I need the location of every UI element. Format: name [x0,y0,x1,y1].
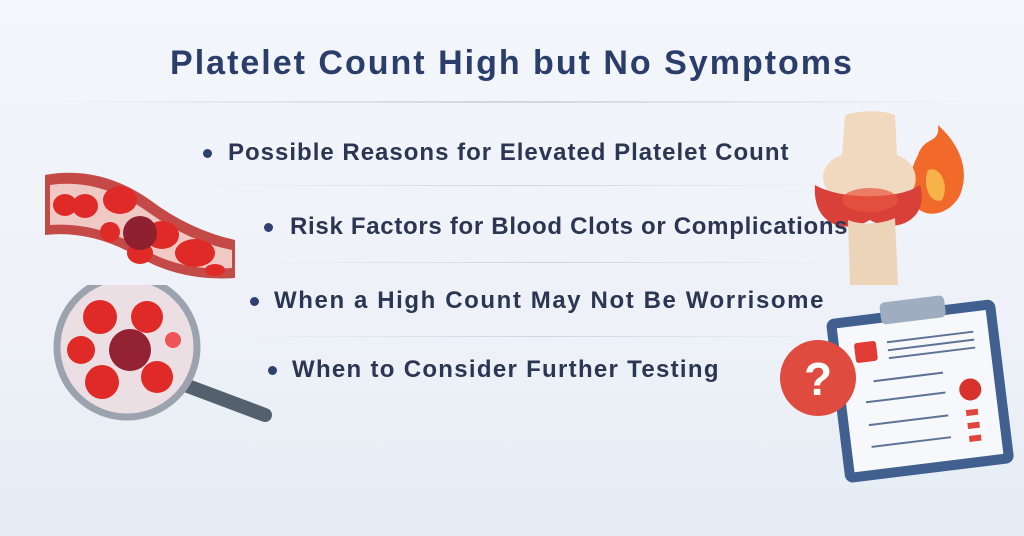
illustration: clipboard with question mark [780,296,1014,482]
title: Platelet Count High but No Symptoms [170,44,854,82]
illustration: magnifying glass [54,285,272,422]
illustration: inflamed knee joint [814,111,964,285]
bullet 3: When a High Count May Not Be Worrisome [274,287,825,314]
bullet 2: Risk Factors for Blood Clots or Complications [290,213,848,240]
illustration: blood vessel [45,172,235,278]
bullet 4: When to Consider Further Testing [292,356,720,383]
illustration: clipboard with question mark: ? [804,353,832,405]
bullet 1: Possible Reasons for Elevated Platelet Count [228,139,789,166]
